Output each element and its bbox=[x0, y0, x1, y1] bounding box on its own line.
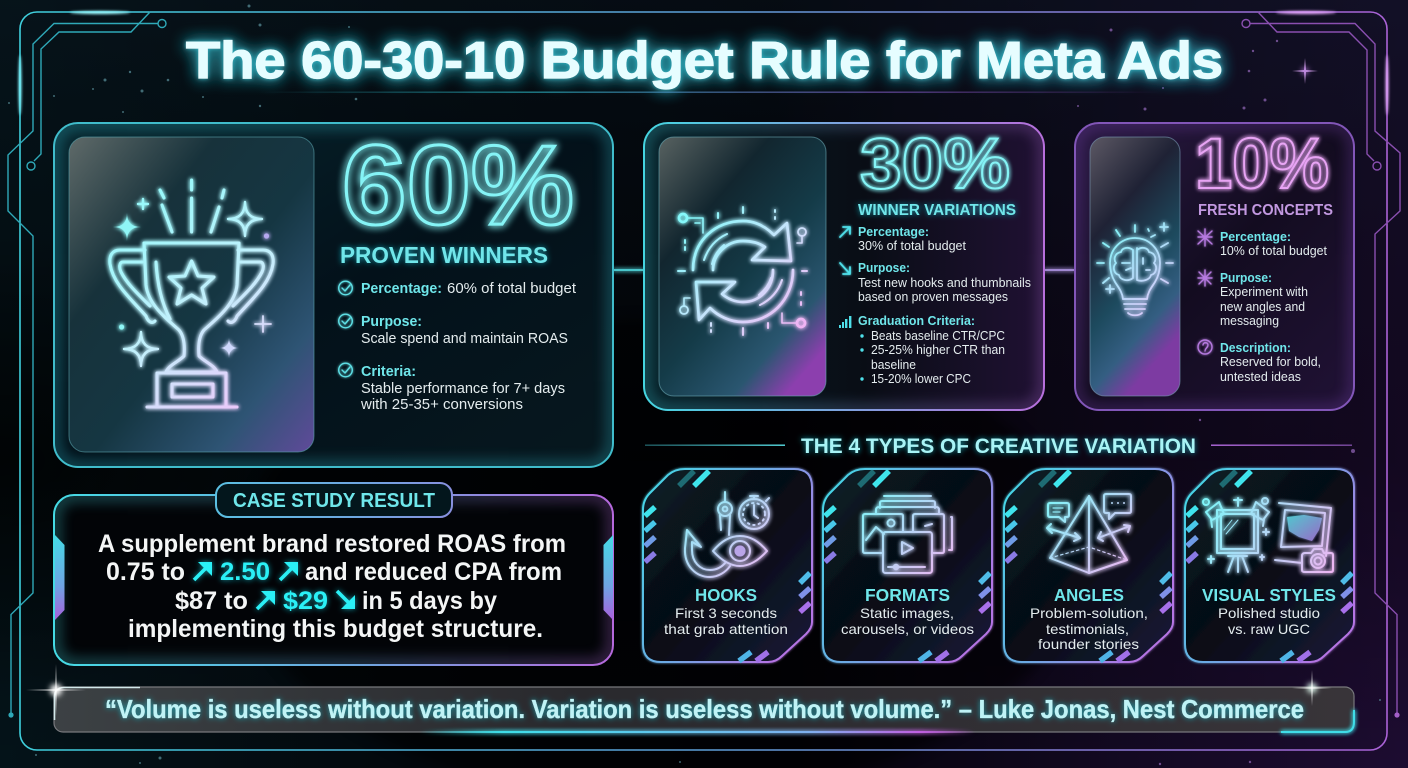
icon: trophy bbox=[110, 180, 273, 407]
list: 30 percent details: Graduation Criteria: bbox=[858, 314, 975, 328]
heading: the 4 types of creative variation: THE 4 TYPES OF CREATIVE VARIATION bbox=[801, 434, 1196, 458]
icon: trend arrows bbox=[194, 562, 355, 609]
icon: refresh arrows bbox=[678, 207, 807, 335]
description: visual styles: Polished studio bbox=[1218, 605, 1320, 621]
list: 60 percent details bbox=[339, 281, 576, 413]
card: formats bbox=[823, 469, 992, 662]
panel: 10 percent fresh concepts bbox=[1075, 123, 1354, 410]
case study text: 0.75 to bbox=[106, 558, 185, 586]
case study text: $29 bbox=[283, 587, 328, 615]
icon: studio softbox and polaroid camera bbox=[1203, 498, 1333, 572]
panel: 60 percent proven winners bbox=[54, 122, 613, 467]
case study text: A supplement brand restored ROAS from bbox=[98, 530, 566, 558]
list: 60 percent details: Criteria: bbox=[361, 364, 416, 380]
image tile: light bulb bbox=[1090, 137, 1180, 396]
icon: brain light bulb bbox=[1097, 223, 1173, 315]
list: 60 percent details: Scale spend and maintain ROAS bbox=[361, 331, 568, 347]
image tile: refresh arrows bbox=[659, 137, 826, 396]
case study text: in 5 days by bbox=[362, 587, 497, 615]
case study text: 2.50 bbox=[220, 558, 270, 586]
list: 10 percent details: Experiment with bbox=[1220, 285, 1308, 299]
description: hooks: First 3 seconds bbox=[675, 605, 777, 621]
badge: case study result bbox=[216, 483, 452, 517]
case study text: implementing this budget structure. bbox=[128, 615, 543, 643]
case study text bbox=[98, 530, 566, 643]
card: visual styles bbox=[1185, 469, 1354, 662]
label: visual styles: VISUAL STYLES bbox=[1202, 585, 1336, 605]
case study text: and reduced CPA from bbox=[305, 558, 562, 586]
list: 10 percent details: Percentage: bbox=[1220, 230, 1291, 244]
description: formats: carousels, or videos bbox=[841, 621, 974, 637]
quote bar bbox=[26, 664, 1354, 732]
big number 30%: 30% bbox=[860, 125, 1010, 204]
card: hooks bbox=[643, 469, 812, 662]
list: 30 percent details: baseline bbox=[871, 358, 916, 372]
badge: case study result: CASE STUDY RESULT bbox=[233, 490, 435, 512]
icon: filled sparkles bbox=[113, 213, 269, 358]
list: 30 percent details: 15-20% lower CPC bbox=[871, 372, 971, 386]
connector: 30 to 10 bbox=[1044, 269, 1075, 271]
panel: case study result bbox=[54, 483, 613, 665]
flare: right bbox=[1292, 670, 1332, 706]
connector: 60 to 30 bbox=[613, 269, 644, 271]
list: 10 percent details bbox=[1198, 229, 1327, 384]
panel: 30 percent winner variations bbox=[644, 123, 1044, 410]
image tile: trophy bbox=[69, 137, 314, 452]
description: angles: Problem-solution, bbox=[1030, 605, 1148, 621]
case study text: $87 to bbox=[175, 587, 248, 615]
list: 10 percent details: new angles and bbox=[1220, 300, 1305, 314]
list: 10 percent details: untested ideas bbox=[1220, 370, 1301, 384]
heading: proven winners: PROVEN WINNERS bbox=[340, 242, 548, 268]
list: 10 percent details: Reserved for bold, bbox=[1220, 355, 1321, 369]
list: 30 percent details: based on proven messages bbox=[858, 290, 1008, 304]
big number 60%: 60% bbox=[342, 122, 574, 248]
flare: left bbox=[26, 664, 86, 716]
list: 30 percent details: Beats baseline CTR/CPC bbox=[871, 329, 1005, 343]
list: 60 percent details: Stable performance for 7+ days bbox=[361, 381, 565, 397]
list: 30 percent details: Purpose: bbox=[858, 261, 910, 275]
list: 60 percent details: Purpose: bbox=[361, 314, 422, 330]
label: formats: FORMATS bbox=[865, 585, 950, 605]
list: 10 percent details: 10% of total budget bbox=[1220, 244, 1327, 258]
icon: hook with eye and stopwatch bbox=[685, 492, 769, 577]
list: 60 percent details: with 25-35+ conversions bbox=[360, 397, 523, 413]
list: 10 percent details: Purpose: bbox=[1220, 271, 1272, 285]
decorative star bbox=[1292, 58, 1318, 84]
list: 60 percent details: 60% of total budget bbox=[447, 281, 576, 297]
side tabs bbox=[55, 535, 613, 620]
heading: winner variations: WINNER VARIATIONS bbox=[858, 202, 1016, 219]
list: 10 percent details: messaging bbox=[1220, 314, 1279, 328]
list: 30 percent details bbox=[839, 225, 1031, 386]
icon: pyramid with speech bubbles bbox=[1047, 494, 1131, 573]
list: 30 percent details: Test new hooks and thumbnails bbox=[858, 276, 1031, 290]
list: 30 percent details: 30% of total budget bbox=[858, 239, 966, 253]
list: 30 percent details: Percentage: bbox=[858, 225, 929, 239]
description: formats bbox=[841, 605, 974, 637]
icon: media formats bbox=[863, 496, 952, 573]
heading: fresh concepts: FRESH CONCEPTS bbox=[1198, 202, 1333, 219]
quote text: “Volume is useless without variation. Variation is useless without volume.” – Luke Jonas, Nest Commerce bbox=[105, 694, 1304, 724]
description: visual styles bbox=[1218, 605, 1320, 637]
label: angles: ANGLES bbox=[1054, 585, 1124, 605]
description: angles: testimonials, bbox=[1046, 621, 1129, 637]
description: angles: founder stories bbox=[1038, 636, 1139, 652]
big number 10%: 10% bbox=[1195, 125, 1329, 204]
list: 30 percent details: 25-25% higher CTR than bbox=[871, 343, 1005, 357]
description: hooks bbox=[664, 605, 788, 637]
title: The 60-30-10 Budget Rule for Meta Ads bbox=[186, 32, 1223, 90]
card: angles bbox=[1004, 469, 1173, 662]
description: visual styles: vs. raw UGC bbox=[1228, 621, 1310, 637]
icon detail: photo scribble bbox=[1287, 515, 1322, 541]
description: formats: Static images, bbox=[860, 605, 954, 621]
label: hooks: HOOKS bbox=[695, 585, 757, 605]
description: angles bbox=[1030, 605, 1148, 652]
list: 10 percent details: Description: bbox=[1220, 341, 1291, 355]
list: 60 percent details: Percentage: bbox=[361, 281, 442, 297]
description: hooks: that grab attention bbox=[664, 621, 788, 637]
